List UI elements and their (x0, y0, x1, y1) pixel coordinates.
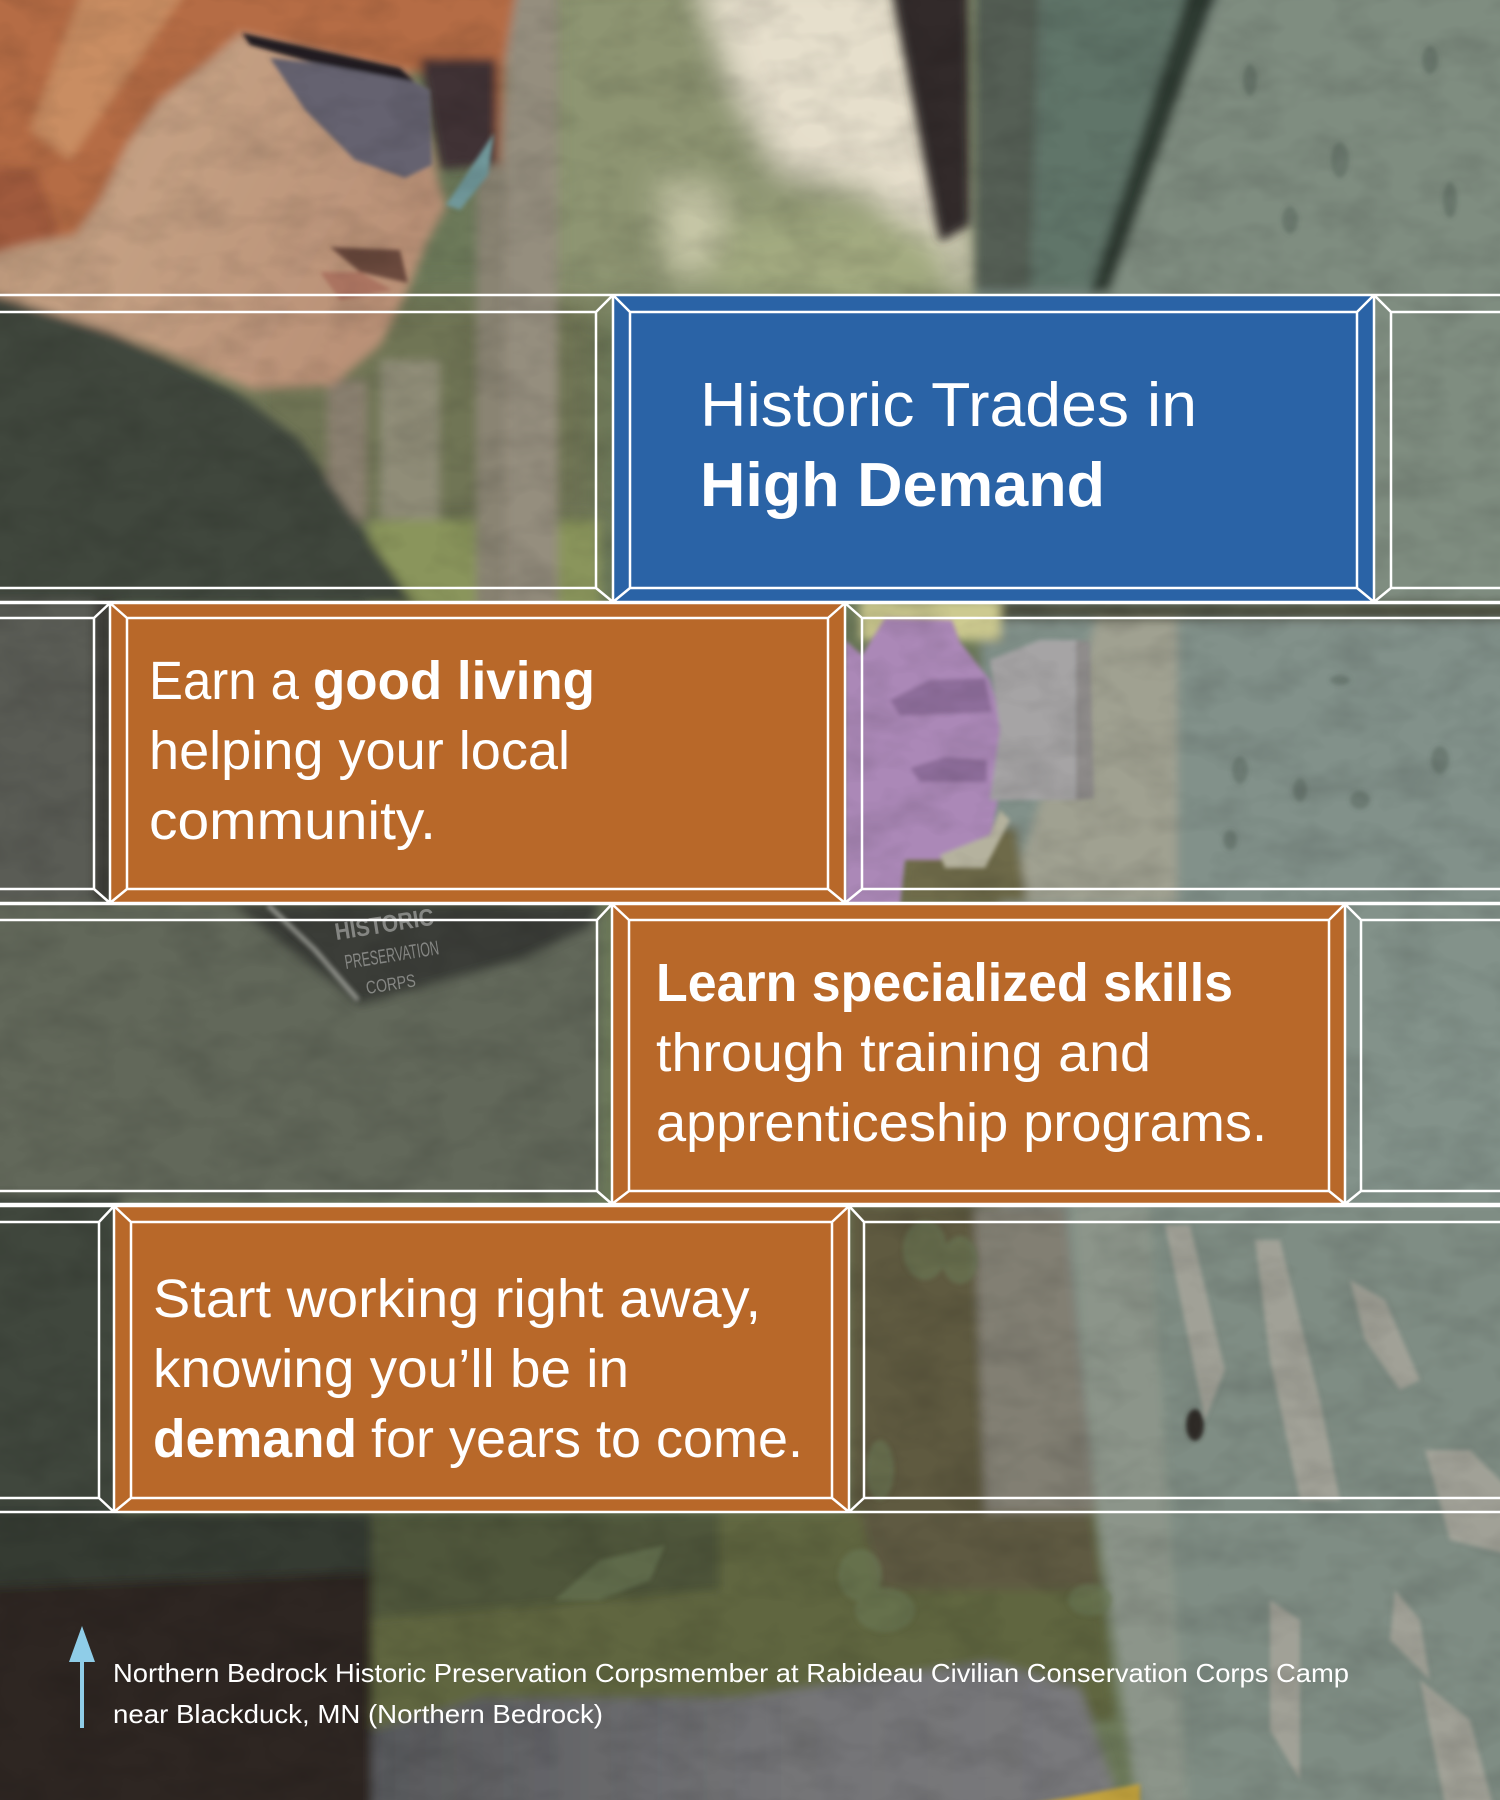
shirt logo text in photo: CORPS (365, 970, 417, 998)
roof overhang (888, 0, 970, 242)
leaves (555, 1220, 1112, 1632)
text block: knowing you’ll be in (153, 1339, 629, 1399)
text block: demand (153, 1409, 357, 1469)
text block: good living (313, 651, 595, 711)
photo caption: near Blackduck, MN (Northern Bedrock) (113, 1699, 603, 1729)
scraper tool (990, 640, 1076, 800)
forest behind person (240, 295, 600, 535)
face (0, 33, 446, 390)
text block: Start working right away, (153, 1269, 761, 1329)
photo caption: Northern Bedrock Historic Preservation Corpsmember at Rabideau Civilian Conservation Corps Camp (113, 1658, 1349, 1688)
photo caption (113, 1658, 1349, 1729)
shirt (0, 270, 415, 605)
text block: through training and (656, 1023, 1151, 1083)
trunks (476, 100, 506, 610)
lower wall (1065, 1205, 1500, 1800)
title panel: Historic Trades in High Demand (0, 295, 1500, 602)
heading (700, 371, 1197, 520)
concrete foundation (974, 1205, 1095, 1512)
green wall row 2 (980, 620, 1500, 905)
hair (0, 0, 520, 255)
sky (695, 0, 975, 300)
text block (149, 651, 595, 851)
peel hole (1186, 1409, 1204, 1441)
chest logo arc (268, 905, 358, 1000)
text block: apprenticeship programs. (656, 1093, 1267, 1153)
text block: for years to come. (371, 1409, 803, 1469)
plastic sheet (372, 1662, 1130, 1800)
grass strip (850, 1205, 990, 1525)
text block: helping your local (149, 721, 570, 781)
panel: earn a good living (0, 603, 1500, 903)
glove (845, 618, 1005, 905)
arrow pointing up to photo (69, 1626, 95, 1728)
text block: Learn specialized skills (656, 953, 1233, 1013)
shirt logo text in photo: PRESERVATION (343, 937, 440, 974)
paint peel streaks (1165, 1225, 1500, 1800)
heading: Historic Trades in (700, 371, 1197, 440)
shirt logo text in photo (333, 904, 445, 1001)
panel: start working right away (0, 1206, 1500, 1512)
glasses lens (270, 58, 432, 178)
text block: Earn a (149, 651, 300, 711)
text block (153, 1269, 803, 1469)
yellow edge (1000, 1784, 1140, 1800)
text block: community. (149, 791, 436, 851)
shirt logo text in photo: HISTORIC (333, 904, 436, 946)
heading: High Demand (700, 451, 1105, 520)
grass bottom (372, 1512, 1115, 1750)
plaster specks (1223, 46, 1457, 850)
mouth (330, 247, 408, 283)
panel: learn specialized skills (0, 904, 1500, 1204)
text block (656, 953, 1267, 1153)
mid wall band (975, 602, 1500, 620)
wall upper (975, 0, 1500, 610)
wall row 3 (1000, 903, 1500, 1213)
lower foliage (710, 212, 950, 312)
foliage base (540, 0, 1000, 310)
